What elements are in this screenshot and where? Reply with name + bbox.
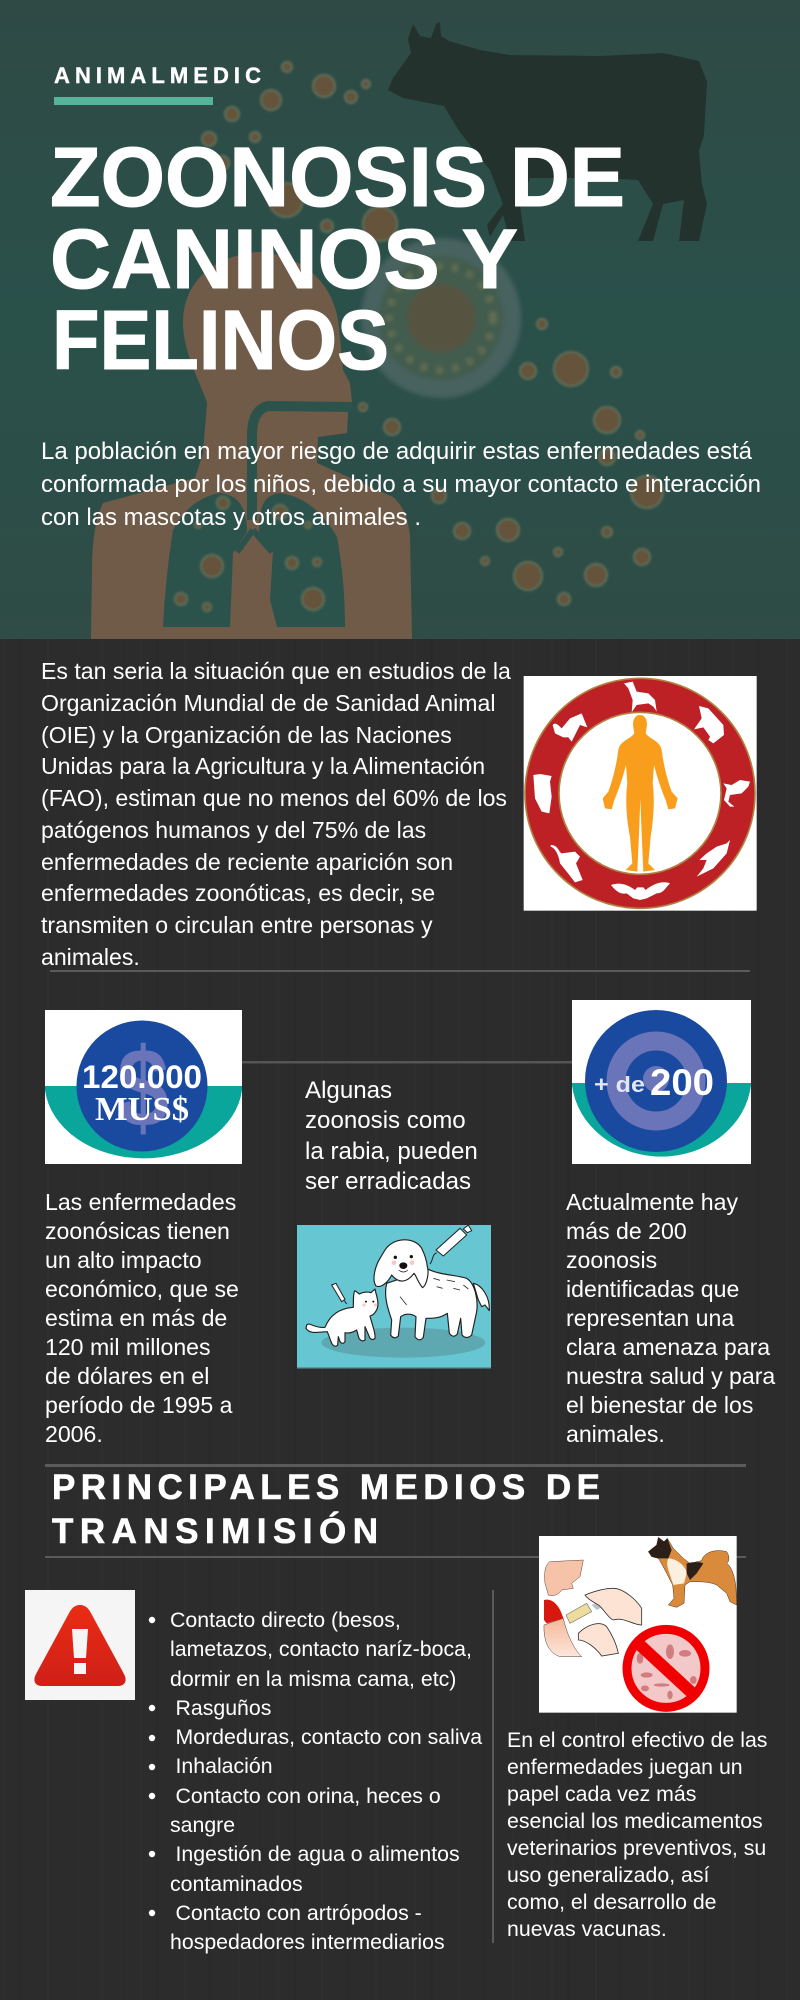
text block: severity of the situation xyxy=(41,658,511,970)
badge value: 120.000 xyxy=(82,1059,202,1095)
illustration: person with lungs xyxy=(91,252,412,639)
text block: veterinary control: papel cada vez más xyxy=(507,1782,696,1806)
heading: transmission xyxy=(52,1468,600,1551)
bullets xyxy=(149,1617,155,1916)
connector line xyxy=(242,1061,572,1064)
list: transmission routes: dormir en la misma cama, etc) xyxy=(170,1667,456,1691)
divider xyxy=(50,970,750,972)
text block: severity of the situation: (OIE) y la Organización de las Naciones xyxy=(41,722,452,748)
list: transmission routes: contaminados xyxy=(170,1872,303,1896)
text block: rabies: Algunas xyxy=(305,1077,392,1104)
text block: economic impact: estima en más de xyxy=(45,1305,227,1331)
badge prefix: + de xyxy=(594,1072,645,1097)
text block: number of zoonoses: representan una xyxy=(566,1305,734,1331)
text block: economic impact xyxy=(45,1189,239,1447)
list: transmission routes: Contacto directo (besos, xyxy=(170,1608,401,1632)
title: FELINOS xyxy=(52,293,389,387)
airway xyxy=(252,406,352,520)
text block: severity of the situation: Unidas para la Agricultura y la Alimentación xyxy=(41,753,485,779)
list: transmission routes: lametazos, contacto naríz-boca, xyxy=(170,1637,472,1661)
list: transmission routes: Contacto con orina, heces o xyxy=(176,1784,441,1808)
title: CANINOS Y xyxy=(50,212,518,306)
text block: veterinary control: esencial los medicamentos xyxy=(507,1809,763,1833)
intro text: La población en mayor riesgo de adquirir estas enfermedades está xyxy=(41,438,752,465)
icon: vaccinated dog and cat xyxy=(297,1225,491,1368)
text block: number of zoonoses: identificadas que xyxy=(566,1276,739,1302)
heading: transmission: PRINCIPALES MEDIOS DE xyxy=(52,1468,600,1507)
syringe xyxy=(566,1603,592,1623)
illustration: small viruses xyxy=(175,62,663,611)
hero background xyxy=(0,0,800,639)
text block: veterinary control: enfermedades juegan un xyxy=(507,1755,743,1779)
prohibition sign xyxy=(627,1629,705,1707)
list: transmission routes: sangre xyxy=(170,1813,235,1837)
text block: number of zoonoses: animales. xyxy=(566,1421,665,1447)
text block: rabies: la rabia, pueden xyxy=(305,1138,478,1165)
intro text: conformada por los niños, debido a su mayor contacto e interacción xyxy=(41,471,761,498)
brand name: ANIMALMEDIC xyxy=(54,63,261,88)
text block: rabies xyxy=(305,1077,478,1195)
illustration: cow silhouette xyxy=(388,22,707,241)
text block: economic impact: zoonósicas tienen xyxy=(45,1218,230,1244)
icon: warning sign xyxy=(25,1590,135,1700)
text block: veterinary control: como, el desarrollo de xyxy=(507,1890,717,1914)
column divider xyxy=(492,1590,494,1943)
text block: number of zoonoses: Actualmente hay xyxy=(566,1189,738,1215)
text block: rabies: zoonosis como xyxy=(305,1107,466,1134)
right lung xyxy=(259,493,345,627)
icon: 120.000 MUS$ badge xyxy=(45,1010,242,1164)
woman xyxy=(545,1560,583,1596)
badge number: 200 xyxy=(650,1062,714,1103)
cat xyxy=(306,1289,378,1346)
icons: animal silhouettes xyxy=(533,682,750,900)
text block: severity of the situation: transmiten o circulan entre personas y xyxy=(41,912,433,938)
divider xyxy=(45,1556,746,1558)
text block: veterinary control: En el control efectivo de las xyxy=(507,1728,767,1752)
text block: number of zoonoses: nuestra salud y para xyxy=(566,1363,775,1389)
text block: economic impact: 2006. xyxy=(45,1421,103,1447)
left lung xyxy=(163,493,247,627)
text block: severity of the situation: Es tan seria la situación que en estudios de la xyxy=(41,658,511,684)
dollar sign: $ xyxy=(117,1025,169,1150)
text block: veterinary control: veterinarios preventivos, su xyxy=(507,1836,766,1860)
icon: human figure xyxy=(603,715,678,872)
panel: hero xyxy=(0,0,800,639)
syringes xyxy=(332,1225,472,1304)
list: transmission routes: hospedadores intermediarios xyxy=(170,1930,445,1954)
text block: severity of the situation: enfermedades de reciente aparición son xyxy=(41,849,453,875)
text block: severity of the situation: patógenos humanos y del 75% de las xyxy=(41,817,426,843)
list: transmission routes: Contacto con artrópodos - xyxy=(176,1901,422,1925)
intro text xyxy=(41,438,761,531)
illustration: large virus xyxy=(361,238,521,398)
intro text: con las mascotas y otros animales . xyxy=(41,504,421,531)
text block: veterinary control xyxy=(507,1728,767,1941)
text block: severity of the situation: Organización Mundial de de Sanidad Animal xyxy=(41,690,495,716)
text block: number of zoonoses xyxy=(566,1189,775,1447)
text block: economic impact: período de 1995 a xyxy=(45,1392,233,1418)
heading: transmission: TRANSIMISIÓN xyxy=(52,1511,378,1551)
list: transmission routes: Mordeduras, contacto con saliva xyxy=(176,1725,482,1749)
text block: economic impact: un alto impacto xyxy=(45,1247,202,1273)
title: ZOONOSIS DE xyxy=(50,130,625,224)
list: transmission routes: Inhalación xyxy=(176,1754,273,1778)
dog xyxy=(374,1240,489,1340)
text block: severity of the situation: animales. xyxy=(41,944,140,970)
text block: rabies: ser erradicadas xyxy=(305,1168,471,1195)
dog xyxy=(648,1537,737,1607)
title xyxy=(50,130,625,387)
hands xyxy=(585,1588,642,1625)
divider xyxy=(45,1464,746,1467)
text block: severity of the situation: enfermedades zoonóticas, es decir, se xyxy=(41,880,435,906)
text block: economic impact: 120 mil millones xyxy=(45,1334,211,1360)
icon: human and animals ring xyxy=(524,676,757,911)
list: transmission routes xyxy=(149,1608,482,1954)
text block: economic impact: económico, que se xyxy=(45,1276,239,1302)
list: transmission routes: Ingestión de agua o alimentos xyxy=(176,1842,460,1866)
text block: number of zoonoses: clara amenaza para xyxy=(566,1334,770,1360)
text block: veterinary control: nuevas vacunas. xyxy=(507,1917,667,1941)
text block: number of zoonoses: zoonosis xyxy=(566,1247,657,1273)
brand underline xyxy=(54,97,213,105)
text block: number of zoonoses: más de 200 xyxy=(566,1218,687,1244)
icon: vaccination and parasite prohibition xyxy=(539,1536,737,1713)
list: transmission routes: Rasguños xyxy=(176,1696,271,1720)
text block: economic impact: Las enfermedades xyxy=(45,1189,236,1215)
text block: severity of the situation: (FAO), estiman que no menos del 60% de los xyxy=(41,785,507,811)
badge unit: MUS$ xyxy=(95,1091,189,1128)
panel: dark textured area xyxy=(0,639,800,2000)
text block: economic impact: de dólares en el xyxy=(45,1363,209,1389)
text block: number of zoonoses: el bienestar de los xyxy=(566,1392,753,1418)
icon: + de 200 badge xyxy=(572,1000,751,1164)
text block: veterinary control: uso generalizado, así xyxy=(507,1863,710,1887)
